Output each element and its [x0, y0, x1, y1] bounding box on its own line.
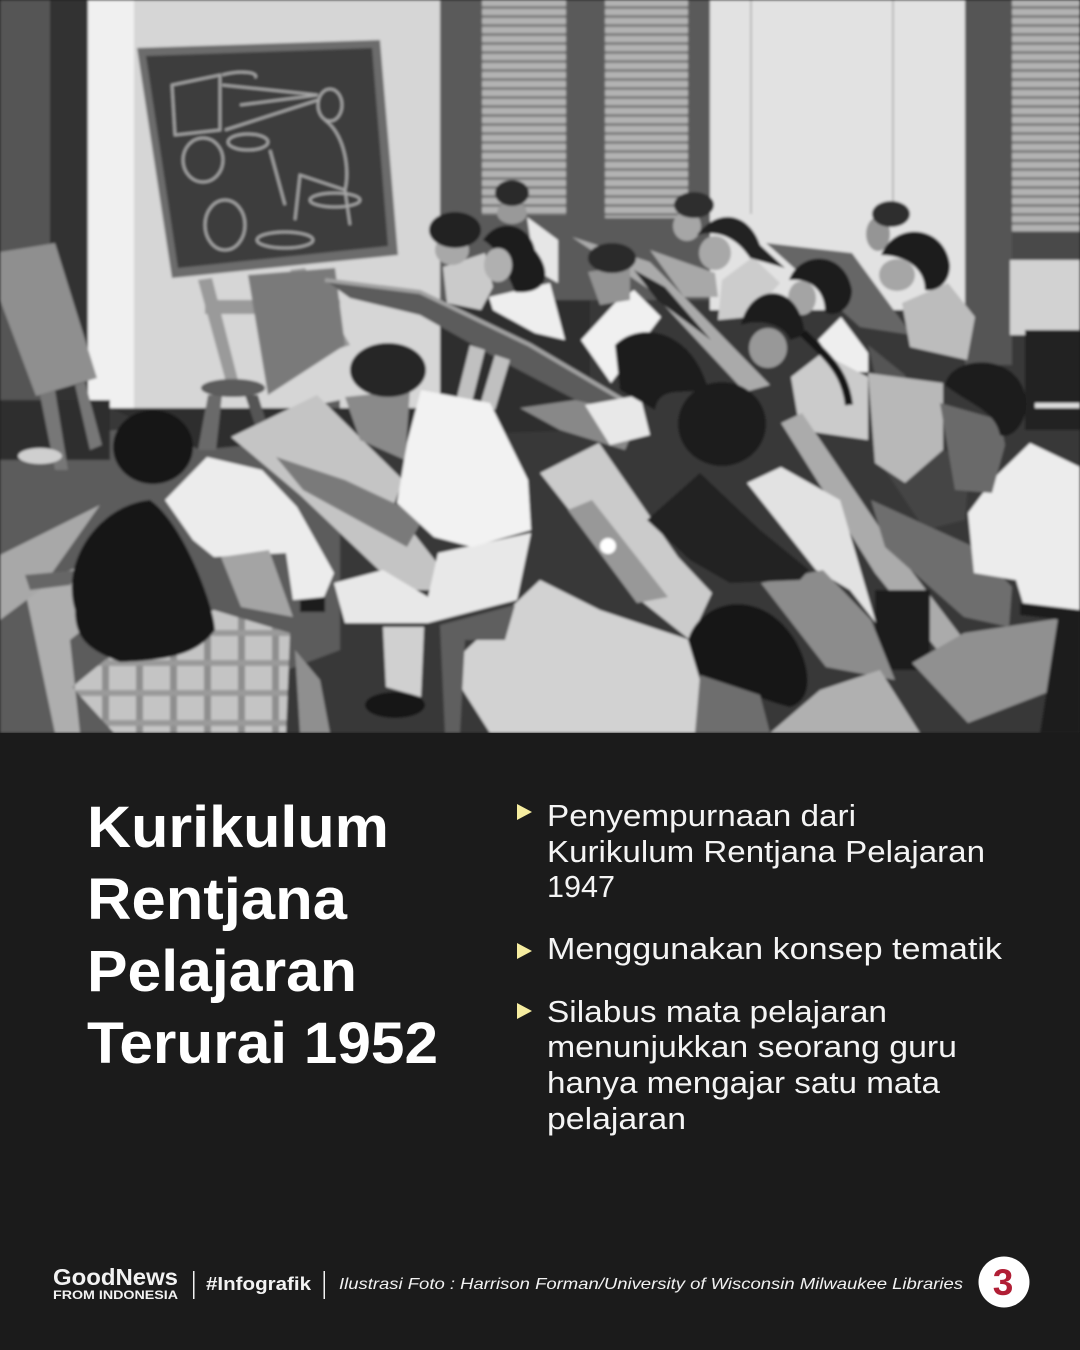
bullet 1: Kurikulum Rentjana Pelajaran	[547, 834, 985, 869]
footer	[53, 1256, 1030, 1308]
right wall	[710, 0, 972, 310]
center hair and shirt	[747, 467, 876, 623]
page number badge: 3	[993, 1262, 1013, 1303]
girl two	[489, 283, 565, 340]
braid girl	[791, 353, 868, 440]
hashtag: #Infografik	[206, 1274, 312, 1294]
leaning board	[0, 243, 97, 396]
right girl	[902, 283, 975, 360]
bullet 1: Penyempurnaan dari	[547, 798, 856, 833]
student left	[165, 457, 334, 600]
girl one	[443, 253, 493, 310]
door	[440, 0, 712, 300]
photo credit: Ilustrasi Foto : Harrison Forman/University of Wisconsin Milwaukee Libraries	[339, 1276, 963, 1293]
back row boards	[325, 237, 912, 418]
photo speck	[600, 538, 616, 554]
man: trousers	[334, 533, 531, 623]
title: Pelajaran	[87, 939, 357, 1004]
bullet 3: menunjukkan seorang guru	[547, 1029, 957, 1064]
easel and stool	[198, 268, 350, 450]
floor	[0, 400, 340, 733]
front students	[72, 500, 920, 733]
bullet 2: Menggunakan konsep tematik	[547, 931, 1003, 966]
logo: GoodNews from Indonesia: GoodNews	[53, 1264, 178, 1290]
bottom woman	[770, 670, 920, 733]
hair girl with white skirt	[520, 400, 640, 450]
title	[87, 795, 438, 1076]
boy	[581, 290, 661, 383]
bullet 3: pelajaran	[547, 1101, 686, 1136]
back row students	[429, 180, 975, 530]
bullet list	[517, 798, 1003, 1136]
girl four	[718, 257, 780, 320]
back teacher	[527, 217, 558, 283]
bullet 1: 1947	[547, 869, 615, 904]
man and middle students	[113, 343, 1080, 733]
logo: GoodNews from Indonesia	[53, 1264, 178, 1302]
bullet 3	[517, 994, 957, 1136]
girl with white blouse	[818, 317, 868, 372]
title: Rentjana	[87, 867, 348, 932]
logo: GoodNews from Indonesia: FROM INDONESIA	[53, 1288, 178, 1302]
bullet 1	[517, 798, 985, 904]
title: Terurai 1952	[87, 1011, 438, 1076]
man: shirt	[397, 390, 531, 547]
man: arm and face	[276, 457, 424, 547]
girl five	[866, 217, 890, 251]
bullet 3: Silabus mata pelajaran	[547, 994, 887, 1029]
left wall	[0, 0, 51, 402]
boy right: shirt, head and shorts	[912, 617, 1068, 723]
lower right skirt	[868, 373, 943, 483]
page number badge	[978, 1256, 1030, 1308]
chalkboard	[137, 40, 398, 278]
woman with hair	[761, 570, 895, 680]
title: Kurikulum	[87, 795, 389, 860]
middle and front boards	[0, 395, 964, 733]
bullet 3: hanya mengajar satu mata	[547, 1065, 941, 1100]
girl three	[650, 250, 718, 297]
plaid woman	[72, 610, 290, 733]
photo: drawing class	[0, 0, 1080, 733]
